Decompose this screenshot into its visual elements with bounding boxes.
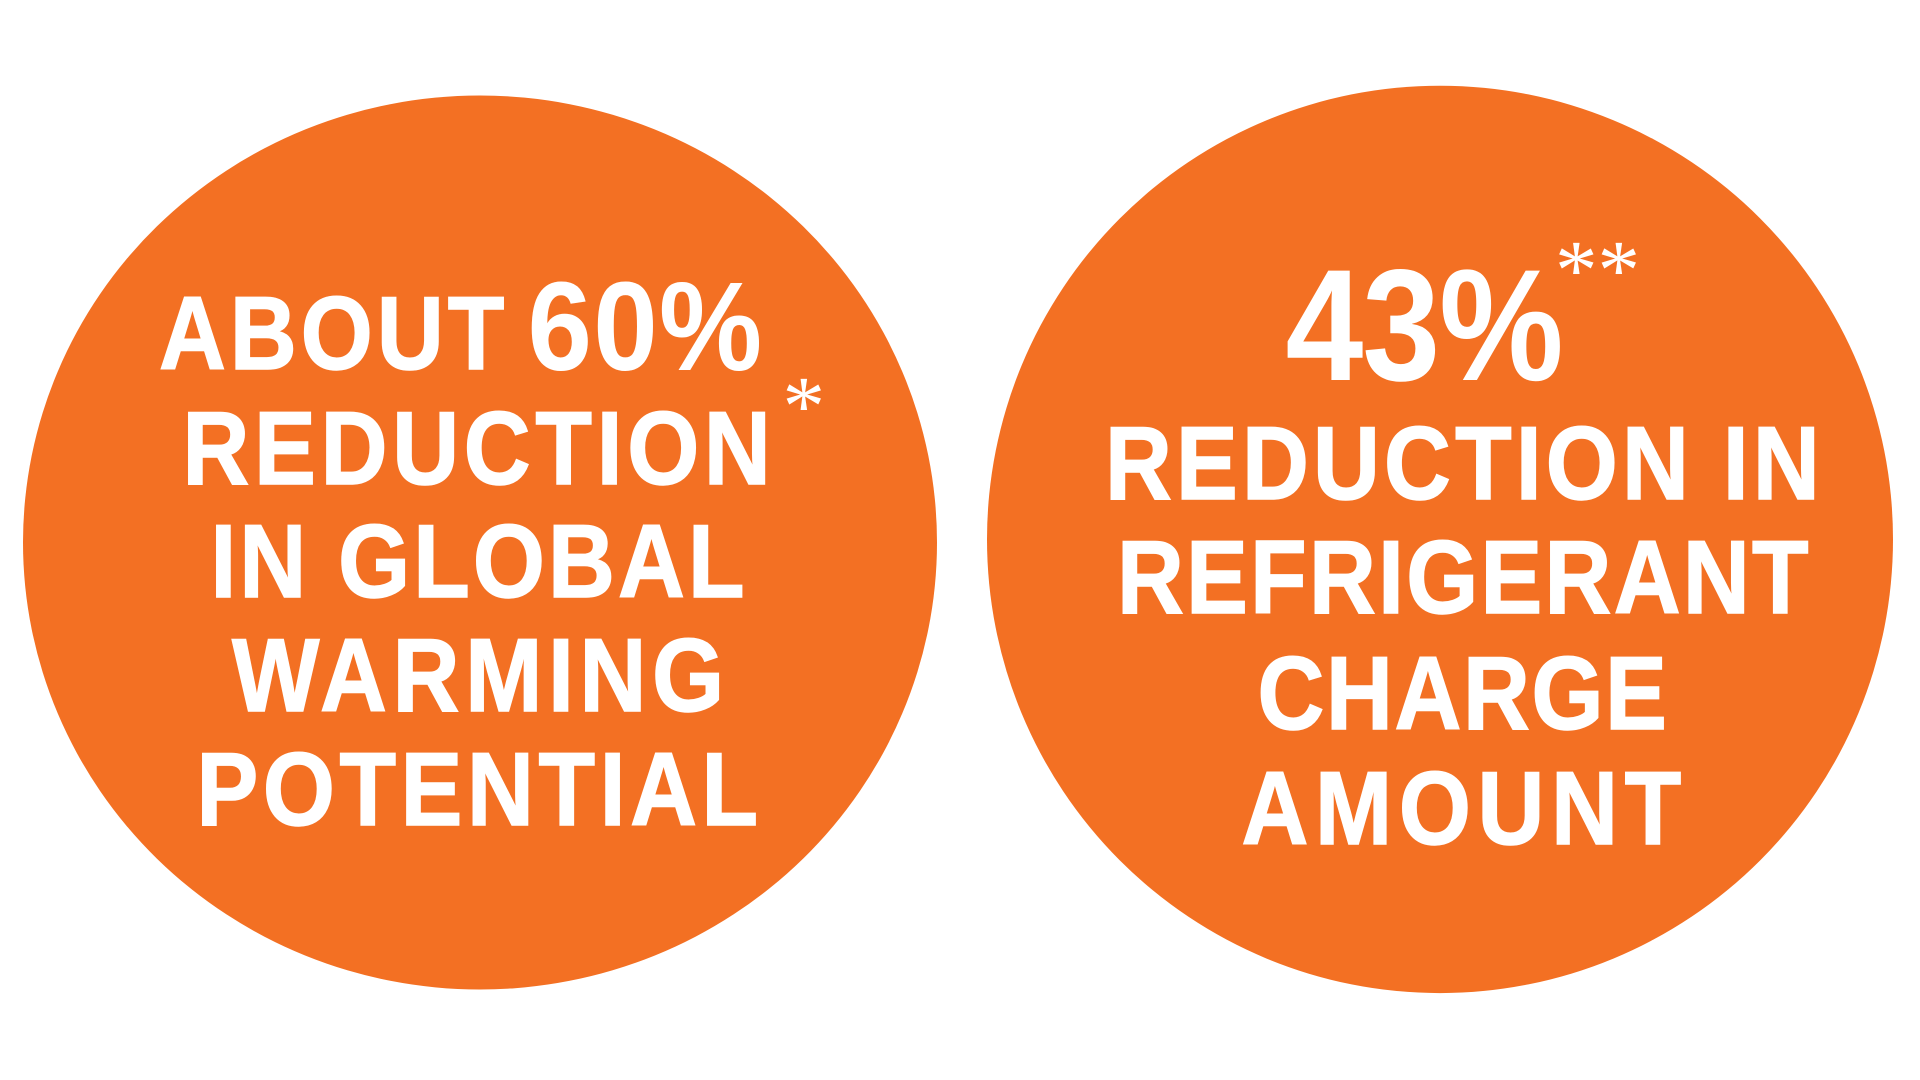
- text: about 60% reduction in global warming potential: [159, 256, 771, 847]
- text: 43% reduction in refrigerant charge amount: REDUCTION IN: [1105, 405, 1820, 521]
- text: 43% reduction in refrigerant charge amount: [1105, 236, 1820, 866]
- text: 43% reduction in refrigerant charge amount: CHARGE: [1258, 635, 1667, 751]
- text: 43% reduction in refrigerant charge amount: 43%: [1286, 236, 1564, 414]
- text: 43% reduction in refrigerant charge amount: AMOUNT: [1242, 750, 1681, 866]
- orange circle right: [987, 86, 1893, 993]
- footnote asterisks right: **: [1555, 224, 1640, 318]
- text: about 60% reduction in global warming potential: REDUCTION: [182, 390, 771, 506]
- text: about 60% reduction in global warming potential: ABOUT: [159, 275, 504, 391]
- text: about 60% reduction in global warming potential: 60%: [528, 256, 762, 397]
- text: about 60% reduction in global warming potential: WARMING: [232, 617, 724, 733]
- panel: refrigerant charge circle: [987, 86, 1893, 993]
- text: about 60% reduction in global warming potential: POTENTIAL: [196, 731, 758, 847]
- text: 43% reduction in refrigerant charge amount: REFRIGERANT: [1117, 519, 1809, 635]
- text: about 60% reduction in global warming potential: IN GLOBAL: [210, 503, 744, 619]
- orange circle left: [23, 96, 937, 990]
- panel: global warming potential circle: [23, 96, 937, 990]
- footnote asterisk left: *: [782, 360, 825, 454]
